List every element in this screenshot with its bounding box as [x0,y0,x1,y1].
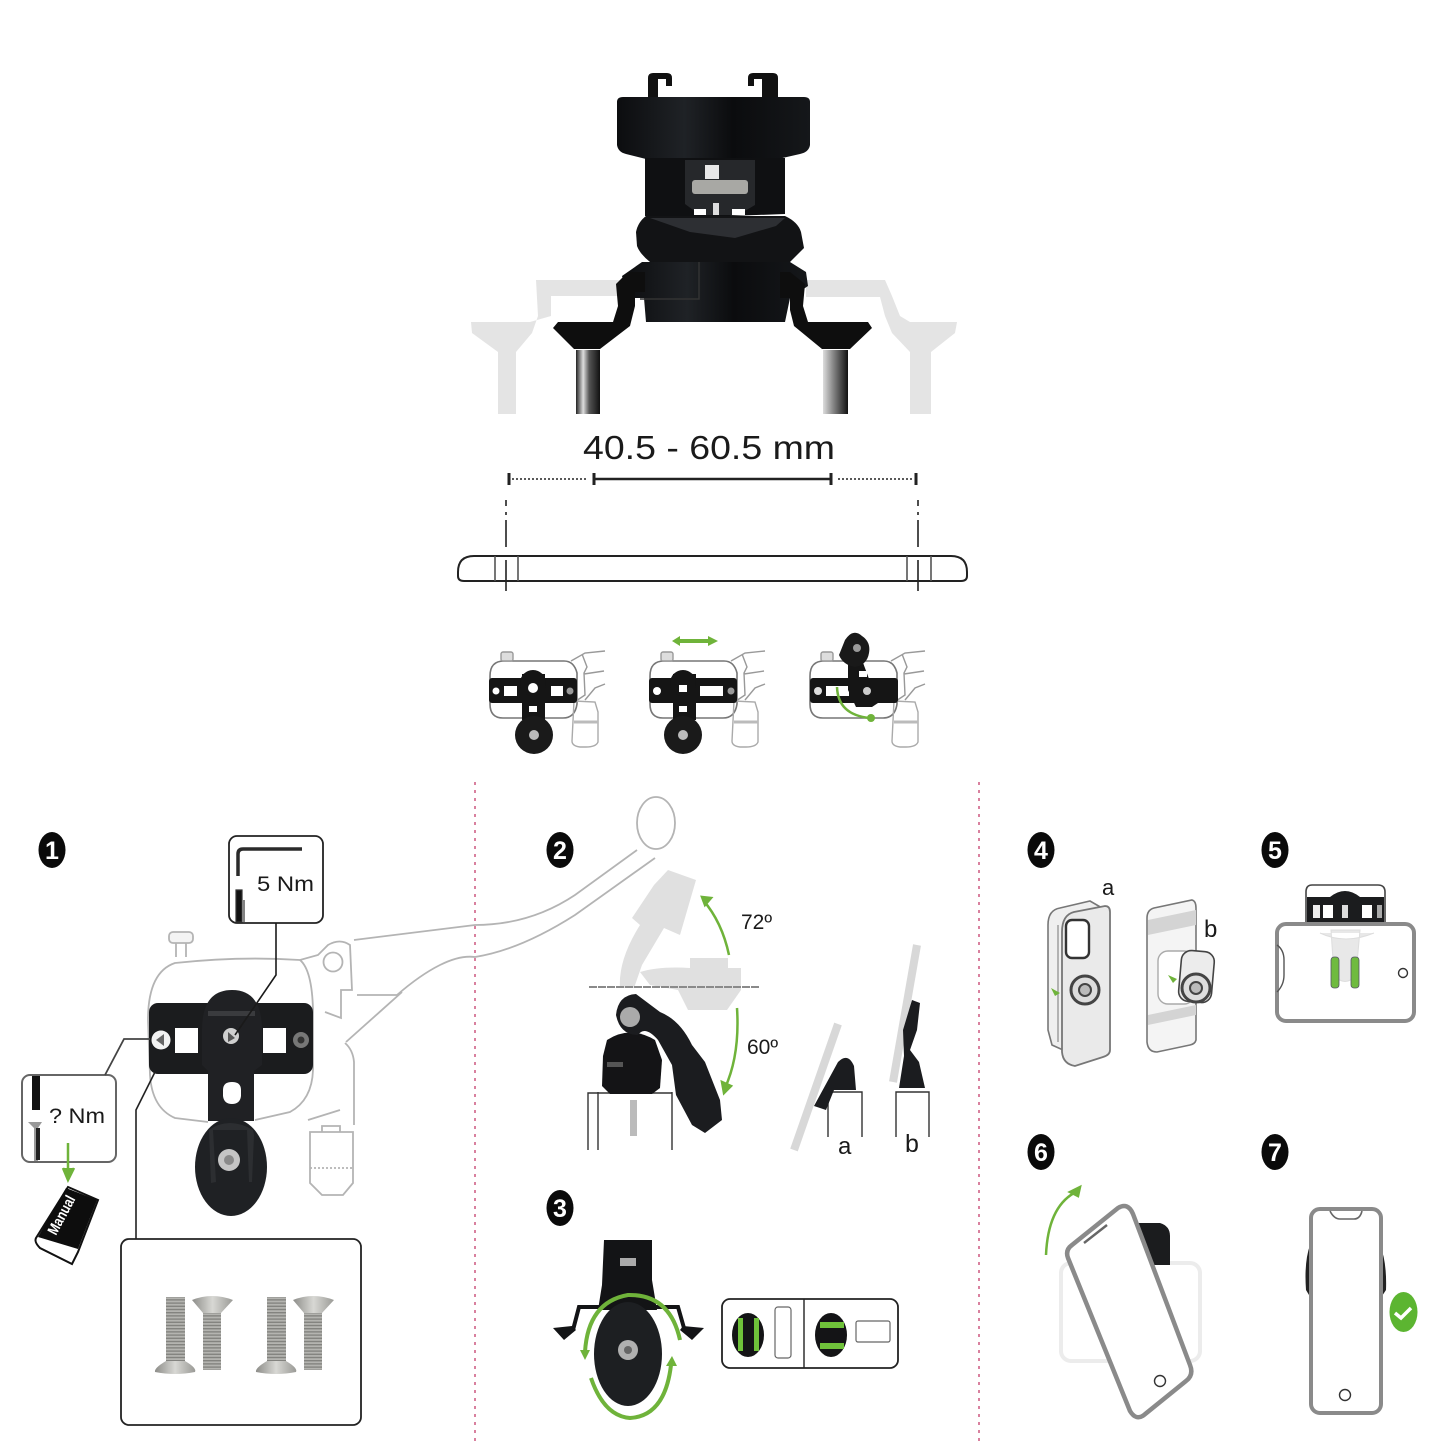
step 7 badge: 7 [1268,1139,1282,1167]
panel: screws [121,1239,361,1425]
small steps: second diagram [649,636,765,754]
callout: unknown torque: ? Nm [49,1105,105,1128]
ghost bracket: extended position [471,280,957,414]
green arc: 60 degrees [722,1008,738,1093]
screw 3 [256,1297,296,1374]
icon: manual book: Manual [45,1193,79,1238]
callout: unknown torque [22,1075,116,1162]
clips [648,73,778,97]
panel: orientation options [722,1299,898,1368]
mounting plate on brake lever [149,990,313,1216]
screw 2 [192,1296,233,1370]
green arrow to manual [63,1143,74,1180]
green arc: 72 degrees [702,897,729,955]
leader line: unknown torque [105,1039,150,1075]
label a: a [1102,875,1115,900]
step 4 badge: 4 [1034,837,1048,865]
phone portrait on mount [1306,1209,1386,1413]
position b [893,945,925,1158]
ghost phone landscape [1061,1263,1200,1361]
phone rotating [1067,1206,1191,1417]
step 5 badge: 5 [1268,837,1282,865]
phone case a [1048,875,1115,1066]
leader line: screw box [136,1072,155,1239]
dimension arrows [506,473,918,547]
horizontal reference line [589,986,760,988]
ghost arm: tilted up positions [620,870,741,1010]
label: 60 degrees: 60º [747,1036,778,1059]
step 4 badge [1028,832,1054,868]
top mount: right arm and pin [780,272,872,414]
step 6 badge [1028,1134,1054,1170]
small steps: third diagram [810,633,925,747]
brake lever outline [148,797,675,1195]
screw 4 [293,1296,334,1370]
small steps: first diagram [489,651,605,754]
step 3 badge [546,1190,574,1226]
step 5 badge [1262,832,1288,868]
panel dividers [475,782,979,1445]
label: 72 degrees: 72º [741,911,772,934]
mount behind phone [1135,1223,1170,1265]
rotating mount [553,1240,704,1418]
callout: 5 Nm: 5 Nm [257,873,314,896]
position a [794,1024,929,1160]
step 1 badge [38,832,66,868]
step 3 badge: 3 [553,1195,567,1223]
step 2 badge: 2 [553,837,567,865]
step 2 badge [546,832,574,868]
icon: green check [1390,1292,1418,1332]
leader line: 5 Nm [235,923,276,1035]
screw 1 [155,1297,195,1374]
green double arrow [672,636,718,646]
top mount: black cylinder head [617,73,810,322]
green curved arrow [837,687,870,718]
green arrows [580,1295,680,1418]
top mount: left arm and pin [553,272,645,414]
tilt mount: side view [588,994,722,1150]
step 7 badge [1262,1134,1288,1170]
label b: b [1204,916,1217,943]
phone landscape on mount [1277,885,1414,1021]
dimension label: 40.5 - 60.5 mm [583,429,835,466]
step 6 badge: 6 [1034,1139,1048,1167]
icon: manual book [36,1187,98,1264]
handlebar clamp width bar [458,556,967,591]
callout: 5 Nm [229,836,323,923]
green arrow: rotate [1046,1187,1080,1255]
step 1 badge: 1 [45,837,59,865]
position a: a [838,1133,852,1160]
phone case b [1147,900,1217,1052]
position b: b [905,1130,919,1158]
